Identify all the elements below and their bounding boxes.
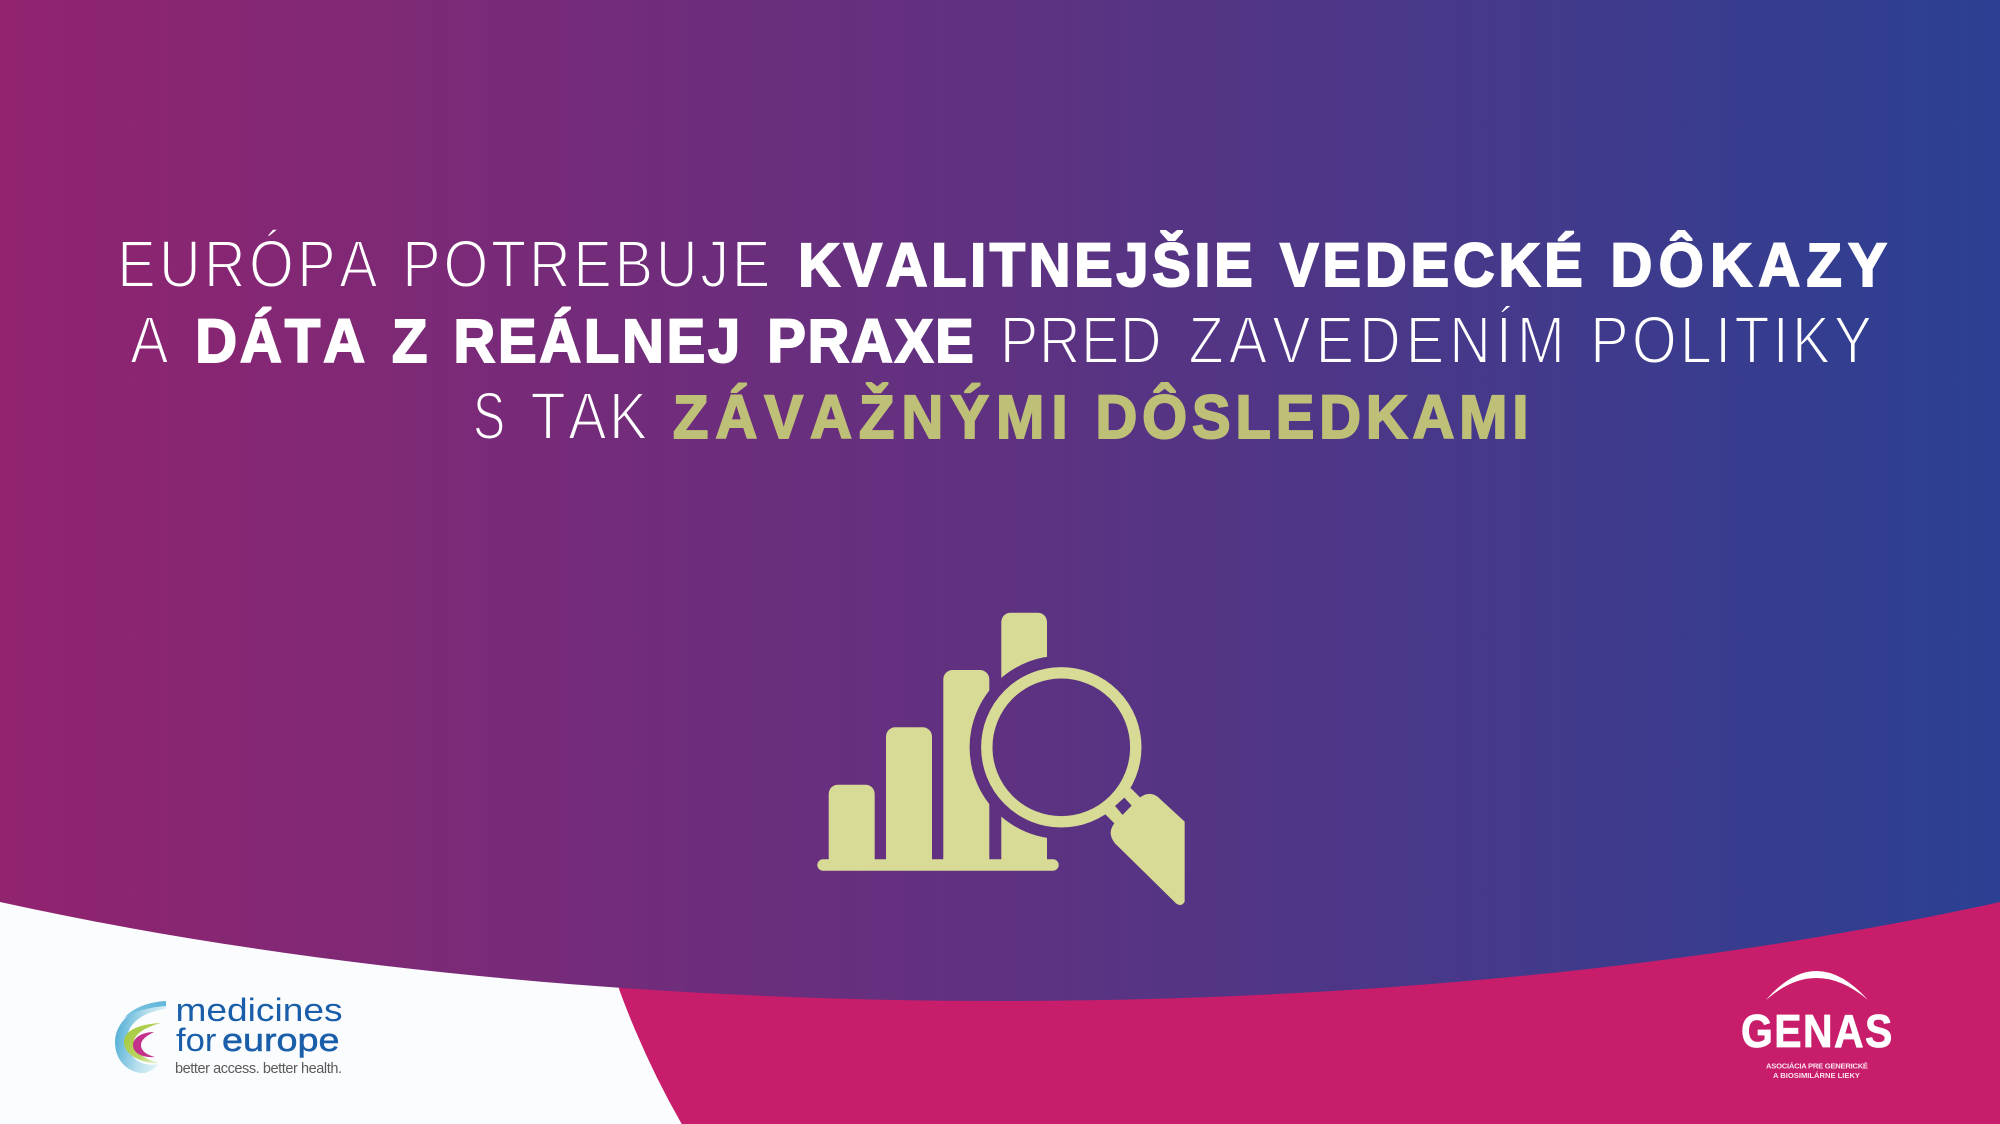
chart baseline <box>817 859 1059 871</box>
title line 2: Z <box>392 306 427 375</box>
magnifier handle <box>1105 788 1185 905</box>
title line 1: EURÓPA <box>117 227 378 302</box>
title line 3: TAK <box>531 379 647 454</box>
title line 1: KVALITNEJŠIE <box>798 230 1253 299</box>
logo wordmark: GENAS <box>1741 1007 1892 1058</box>
title line 1 <box>117 227 1887 302</box>
title line 2: PRAXE <box>767 306 974 375</box>
logo mark <box>115 1001 166 1073</box>
logo tagline: better access. better health. <box>175 1061 342 1077</box>
logo: GENAS <box>1741 971 1892 1080</box>
title line 2: POLITIKY <box>1590 303 1872 378</box>
title line 2: ZAVEDENÍM <box>1189 303 1565 378</box>
icon: bar chart with magnifying glass <box>817 613 1185 905</box>
panel: white bottom background <box>0 880 2000 1124</box>
logo wordmark bold: europe <box>222 1023 340 1058</box>
title line 1: DÔKAZY <box>1611 230 1887 299</box>
title line 2: DÁTA <box>195 306 365 375</box>
title line 3: S <box>473 379 505 454</box>
title line 2 <box>130 303 1872 378</box>
title line 2: A <box>130 303 169 378</box>
magnifier ring <box>987 673 1136 822</box>
title line 1: VEDECKÉ <box>1280 230 1583 299</box>
logo subtitle line 1: ASOCIÁCIA PRE GENERICKÉ <box>1766 1062 1868 1071</box>
title line 2: REÁLNEJ <box>453 306 740 375</box>
title line 3: ZÁVAŽNÝMI <box>673 382 1068 451</box>
title line 1: POTREBUJE <box>402 227 770 302</box>
title line 2: PRED <box>1000 303 1162 378</box>
logo: medicines for europe <box>115 993 343 1077</box>
title line 3 <box>473 379 1528 454</box>
panel: magenta corner <box>619 900 2000 1124</box>
title <box>117 227 1887 454</box>
logo subtitle line 2: A BIOSIMILÁRNE LIEKY <box>1773 1071 1860 1080</box>
magnifier clearance <box>970 656 1153 839</box>
title line 3: DÔSLEDKAMI <box>1095 382 1528 451</box>
chart bars <box>829 613 1047 860</box>
logo wordmark: medicines <box>176 993 343 1028</box>
logo wordmark second line: for <box>176 1023 216 1059</box>
logo arc <box>1766 971 1868 1000</box>
